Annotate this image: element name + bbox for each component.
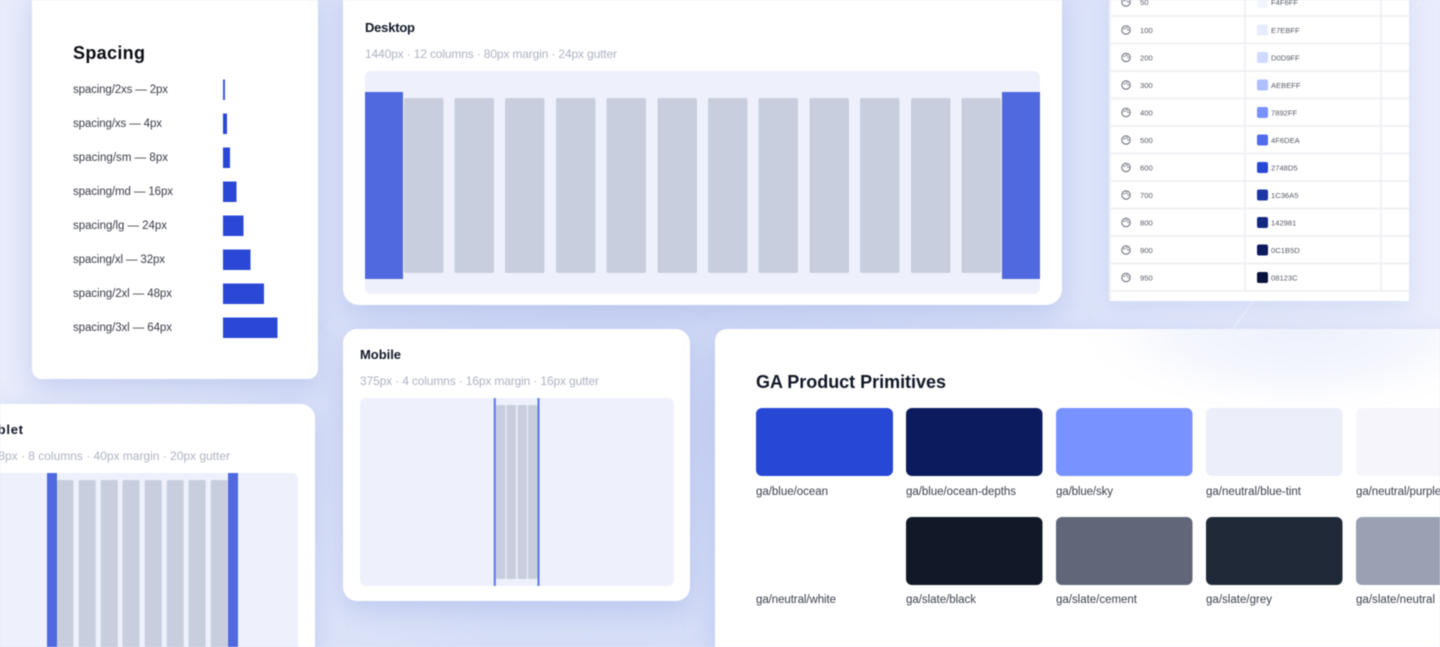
mobile grid diagram (360, 398, 674, 586)
spacing token 2xl: spacing/2xl — 48px (73, 288, 172, 300)
tablet grid diagram (0, 473, 298, 647)
row 200: 200 (1140, 54, 1153, 62)
spacing token xs: spacing/xs — 4px (73, 118, 162, 130)
row 500: 500 (1140, 136, 1153, 145)
swatch sky: ga/blue/sky (1056, 486, 1113, 498)
swatch slate grey (1206, 517, 1342, 606)
swatch ocean depths: ga/blue/ocean-depths (906, 486, 1016, 498)
row 400: 7892FF (1271, 108, 1298, 118)
row 400: 400 (1140, 108, 1153, 118)
spacing token 2xs: spacing/2xs — 2px (73, 84, 168, 96)
row 400 (1122, 107, 1298, 118)
panel: desktop grid (343, 0, 1062, 305)
swatch blue tint (1206, 408, 1342, 498)
row 300: AEBEFF (1271, 81, 1301, 90)
heading: GA product primitives: GA Product Primitives (756, 372, 946, 392)
row 950 (1122, 272, 1298, 283)
row 200 (1122, 52, 1300, 63)
spacing token lg: spacing/lg — 24px (73, 220, 167, 232)
row 200: D0D9FF (1271, 54, 1300, 62)
swatch purple tint (1356, 408, 1440, 498)
swatch slate black (906, 517, 1042, 606)
swatch slate neutral (1356, 517, 1440, 606)
swatch slate cement (1056, 517, 1192, 606)
swatch slate cement: ga/slate/cement (1056, 594, 1138, 606)
spacing token xl (73, 250, 250, 270)
spacing token sm (73, 148, 230, 168)
row 900 (1122, 244, 1300, 256)
spacing token md (73, 182, 236, 202)
mobile grid specs: 375px · 4 columns · 16px margin · 16px gutter (360, 374, 599, 388)
panel: colour scale table (1109, 0, 1409, 301)
row 500: 4F6DEA (1271, 136, 1301, 145)
row 900: 0C1B5D (1271, 246, 1300, 255)
spacing token lg (73, 216, 244, 236)
spacing token xs (73, 114, 227, 134)
swatch slate neutral: ga/slate/neutral (1356, 594, 1435, 606)
desktop grid specs: 1440px · 12 columns · 80px margin · 24px gutter (365, 47, 617, 61)
row 800: 800 (1140, 218, 1153, 228)
spacing token xl: spacing/xl — 32px (73, 254, 165, 266)
row 950: 950 (1140, 274, 1153, 282)
panel: mobile grid (343, 329, 690, 601)
swatch ocean depths (906, 408, 1042, 498)
heading: desktop: Desktop (365, 20, 415, 35)
row 500 (1122, 134, 1301, 146)
swatch slate grey: ga/slate/grey (1206, 594, 1272, 606)
heading: spacing: Spacing (73, 43, 145, 63)
panel: spacing (32, 0, 318, 379)
row 600 (1122, 162, 1298, 173)
row 100: 100 (1140, 26, 1153, 35)
row 800 (1122, 217, 1296, 228)
row 300: 300 (1140, 81, 1153, 90)
spacing token md: spacing/md — 16px (73, 186, 173, 198)
row 600: 600 (1140, 164, 1153, 172)
row 700 (1122, 190, 1298, 200)
desktop grid diagram (365, 71, 1040, 294)
swatch white (756, 517, 893, 606)
heading: mobile: Mobile (360, 347, 401, 362)
row 950: 08123C (1271, 274, 1298, 282)
spacing token 3xl (73, 318, 278, 338)
row 900: 900 (1140, 246, 1153, 255)
row 600: 2748D5 (1271, 164, 1298, 172)
spacing token sm: spacing/sm — 8px (73, 152, 168, 164)
spacing token 3xl: spacing/3xl — 64px (73, 322, 172, 334)
swatch ocean: ga/blue/ocean (756, 486, 828, 498)
swatch white: ga/neutral/white (756, 594, 836, 606)
row 700: 700 (1140, 191, 1153, 200)
row 100 (1122, 24, 1300, 36)
spacing token 2xl (73, 284, 264, 304)
row 300 (1122, 80, 1301, 90)
swatch blue tint: ga/neutral/blue-tint (1206, 486, 1302, 498)
row 100: E7EBFF (1271, 26, 1300, 35)
panel: tablet grid (0, 404, 315, 647)
row 700: 1C36A5 (1271, 191, 1298, 200)
row 800: 142981 (1271, 218, 1296, 228)
panel: GA product primitives (715, 329, 1440, 647)
swatch slate black: ga/slate/black (906, 594, 976, 606)
row 50 (1122, 0, 1298, 8)
swatch ocean (756, 408, 893, 498)
swatch sky (1056, 408, 1192, 498)
